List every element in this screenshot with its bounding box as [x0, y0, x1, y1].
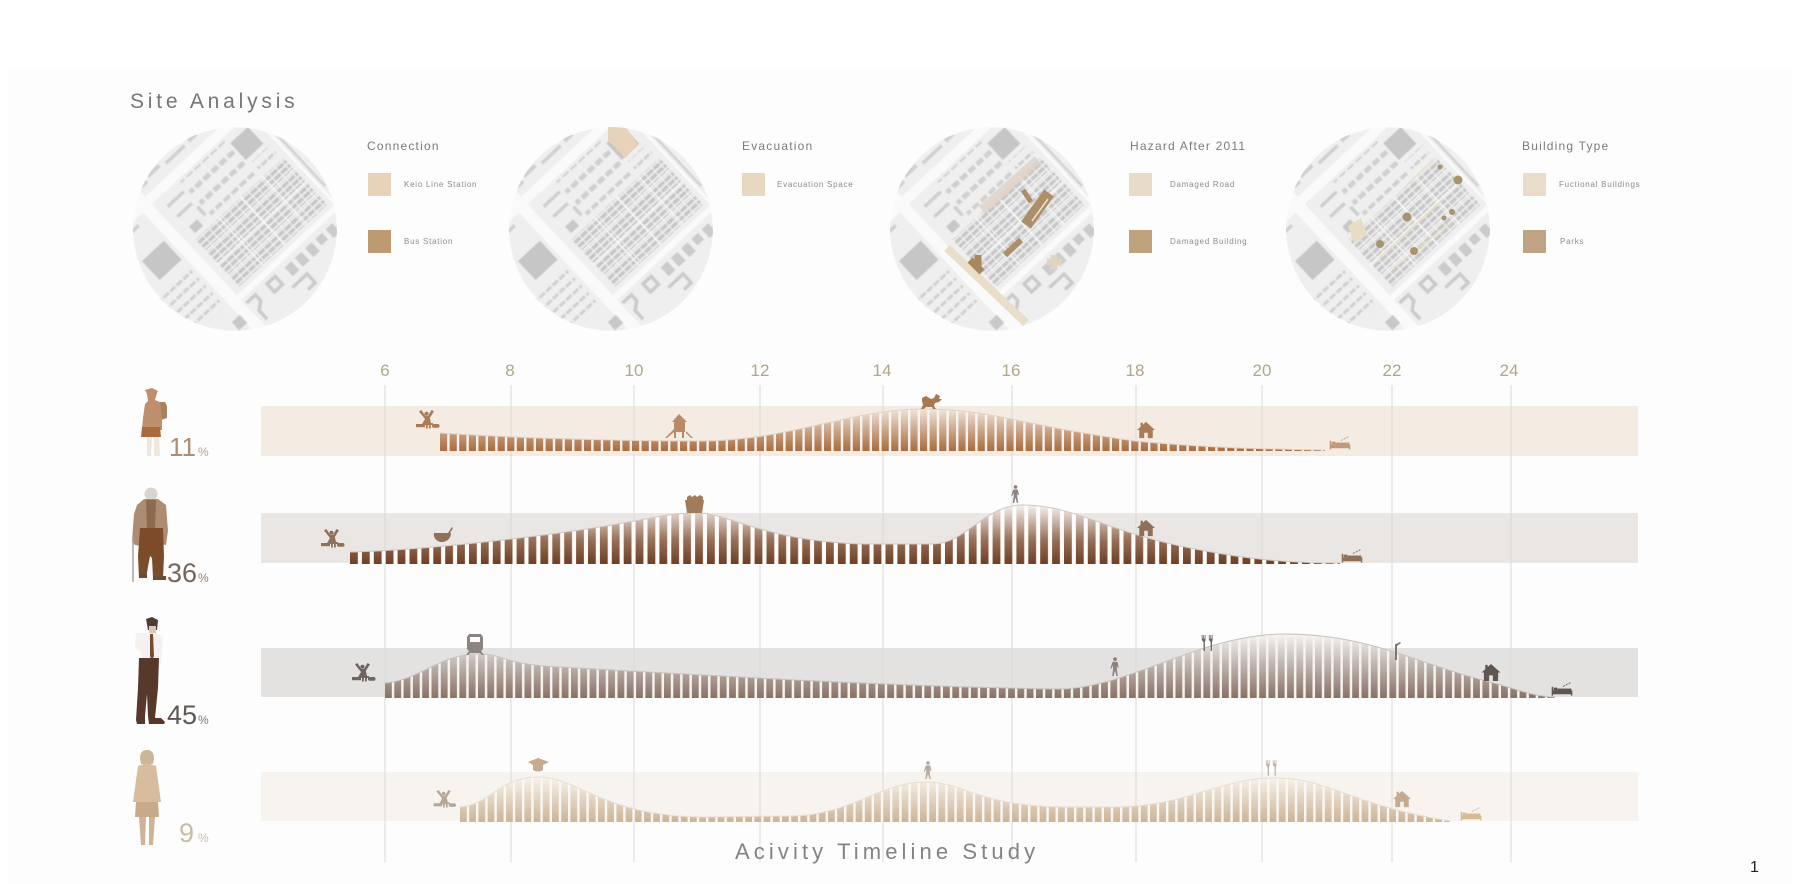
icon: signpost — [1395, 642, 1401, 660]
legend: Hazard After 2011: Damaged Road — [1170, 180, 1235, 189]
icon: playground tower — [665, 414, 693, 438]
hour axis: 14 — [873, 361, 891, 380]
hour axis: 8 — [505, 361, 515, 380]
figure: child with backpack, 11% — [141, 388, 167, 456]
panel: Connection map — [133, 127, 476, 331]
icon: bowl — [434, 527, 453, 542]
icon: bed — [1461, 807, 1481, 821]
label: 11%: % — [198, 445, 209, 459]
icon: home — [1137, 422, 1155, 438]
map: connection — [133, 127, 337, 331]
icon: wake up — [434, 790, 456, 808]
icon: wake up — [416, 410, 440, 428]
icon: wake up — [321, 529, 344, 548]
icon: walker — [1110, 657, 1119, 676]
icon: home — [1137, 520, 1155, 536]
icon: cutlery — [1266, 760, 1276, 776]
hour axis: 6 — [380, 361, 390, 380]
map: hazard after 2011 — [890, 127, 1094, 331]
label: 45%: % — [198, 713, 209, 727]
figure: businessman, 45% — [135, 617, 165, 724]
icon: train — [466, 634, 484, 655]
legend: Evacuation — [742, 139, 854, 196]
icon: basket — [685, 495, 704, 513]
panel: Building Type map — [1286, 127, 1640, 331]
legend: Connection: Bus Station — [404, 237, 453, 246]
label: 11%: 11 — [169, 432, 196, 462]
legend: Connection — [367, 139, 477, 253]
label: 36%: 36 — [167, 558, 197, 588]
legend: Building Type: Parks — [1560, 237, 1584, 246]
hour axis: 22 — [1383, 361, 1401, 380]
panel: Hazard map — [890, 127, 1246, 331]
timeline bands — [261, 406, 1638, 821]
icon: bed — [1330, 436, 1350, 450]
legend: Evacuation: Evacuation — [742, 139, 813, 153]
chart row 4: 9% activity curve — [460, 777, 1450, 822]
footer title: Acivity Timeline Study: Acivity Timeline Study — [735, 839, 1039, 864]
icon: hiker — [924, 761, 932, 779]
chart row 3: 45% activity curve — [385, 634, 1555, 698]
hour axis: 10 — [625, 361, 643, 380]
label: 11% — [169, 432, 209, 462]
label: 9%: % — [198, 831, 209, 845]
map: evacuation — [509, 127, 713, 331]
legend: Hazard After 2011: Damaged Building — [1170, 237, 1247, 246]
hour axis — [380, 361, 1518, 862]
label: 36%: % — [198, 571, 209, 585]
icon: bed — [1342, 549, 1362, 563]
legend: Building Type: Fuctional Buildings — [1559, 180, 1640, 189]
title: Site Analysis: Site Analysis — [130, 90, 298, 113]
hour axis: 20 — [1253, 361, 1271, 380]
icon: home — [1482, 664, 1500, 681]
panel: Evacuation map — [509, 127, 852, 331]
legend: Connection: Connection — [367, 139, 440, 153]
icons row 2 — [321, 485, 1362, 563]
icon: cutlery — [1202, 635, 1213, 651]
hour axis: 12 — [751, 361, 769, 380]
icons row 1 — [416, 394, 1350, 450]
label: 9%: 9 — [179, 818, 194, 848]
chart row 2: 36% activity curve — [350, 505, 1340, 564]
legend: Building Type: Building Type — [1522, 139, 1609, 153]
icon: graduation cap — [528, 758, 549, 772]
icon: rocking horse — [921, 394, 942, 409]
legend: Building Type — [1522, 139, 1640, 253]
figure: elderly man with cane, 36% — [132, 488, 168, 582]
legend: Hazard After 2011 — [1129, 139, 1247, 253]
figure: student, 9% — [133, 750, 161, 845]
page number: 1 — [1750, 859, 1759, 876]
icon: bed — [1552, 682, 1572, 696]
icon: elderly walker — [1011, 485, 1019, 503]
chart row 1: 11% activity curve — [440, 409, 1325, 451]
legend: Connection: Keio Line Station — [404, 180, 477, 189]
label: 9% — [179, 818, 209, 848]
icons row 3 — [352, 634, 1572, 696]
legend: Hazard After 2011: Hazard After 2011 — [1130, 139, 1246, 153]
hour axis: 24 — [1500, 361, 1518, 380]
icon: home — [1393, 791, 1411, 807]
icons row 4 — [434, 758, 1481, 821]
hour axis: 18 — [1126, 361, 1144, 380]
label: 45%: 45 — [167, 700, 197, 730]
icon: wake up — [352, 663, 376, 682]
hour axis: 16 — [1002, 361, 1020, 380]
legend: Evacuation: Evacuation Space — [777, 180, 854, 189]
map: building type — [1286, 127, 1490, 331]
